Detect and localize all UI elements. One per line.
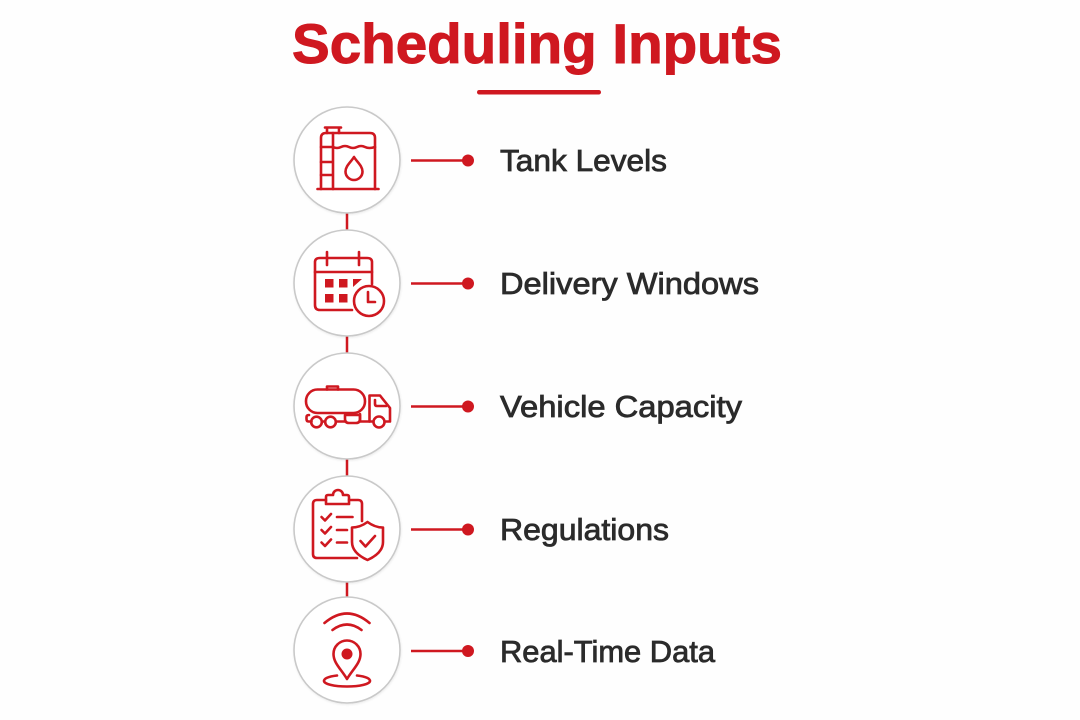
icon: clipboard with shield bbox=[313, 490, 383, 560]
icon: location pin with signal bbox=[324, 614, 370, 686]
connector and dot bbox=[411, 154, 474, 166]
vertical connectors bbox=[346, 213, 348, 597]
label: Real-Time Data bbox=[500, 635, 715, 669]
item: real-time data bbox=[294, 597, 715, 703]
item: tank levels bbox=[294, 107, 667, 213]
icon: storage tank with drop bbox=[318, 128, 378, 189]
circle: regulations bbox=[294, 476, 400, 582]
connector and dot bbox=[411, 645, 474, 657]
connector and dot bbox=[411, 400, 474, 412]
label: Vehicle Capacity bbox=[500, 390, 743, 424]
title: Scheduling Inputs bbox=[292, 12, 782, 75]
title underline bbox=[477, 90, 601, 94]
icon: calendar with clock bbox=[315, 252, 384, 316]
icon: tanker truck bbox=[306, 386, 390, 428]
item: vehicle capacity bbox=[294, 353, 743, 459]
connector and dot bbox=[411, 524, 474, 536]
connector and dot bbox=[411, 278, 474, 290]
circle: tank levels bbox=[294, 107, 400, 213]
label: Delivery Windows bbox=[500, 267, 759, 301]
circle: real-time data bbox=[294, 597, 400, 703]
label: Tank Levels bbox=[500, 144, 667, 178]
item: delivery windows bbox=[294, 230, 759, 336]
item: regulations bbox=[294, 476, 669, 582]
circle: vehicle capacity bbox=[294, 353, 400, 459]
label: Regulations bbox=[500, 513, 669, 547]
circle: delivery windows bbox=[294, 230, 400, 336]
